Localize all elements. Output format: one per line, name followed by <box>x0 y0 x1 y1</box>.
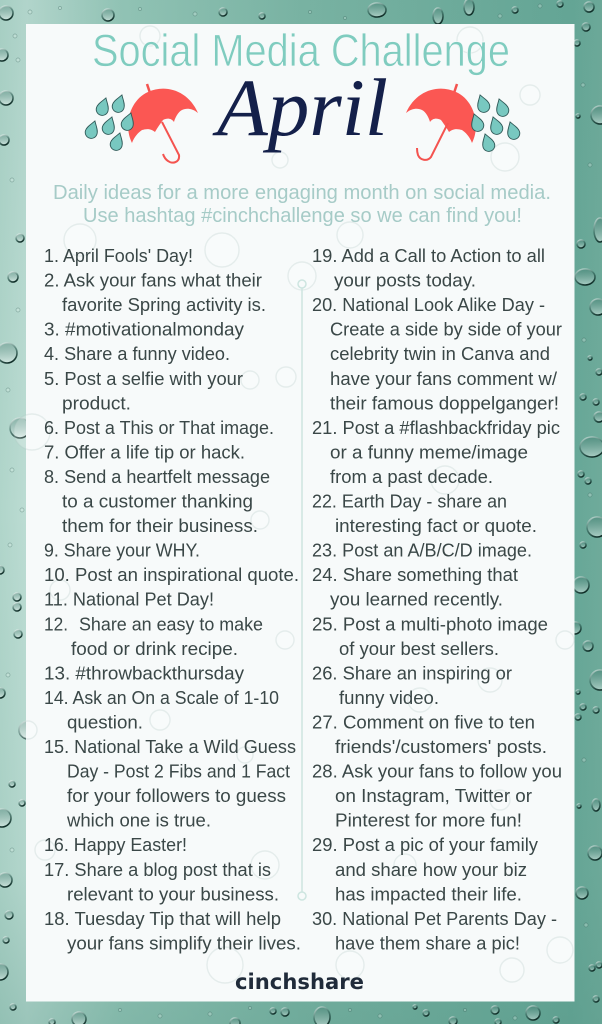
day 19: 19. Add a Call to Action to all <box>312 246 545 266</box>
day 2: favorite Spring activity is. <box>62 295 266 315</box>
day 19 <box>312 246 545 291</box>
day 20: 20. National Look Alike Day - <box>312 295 545 315</box>
day 29: has impacted their life. <box>335 884 522 904</box>
day 12 <box>44 614 263 659</box>
day 18 <box>44 909 301 953</box>
day 29: 29. Post a pic of your family <box>312 835 538 855</box>
day 22: interesting fact or quote. <box>335 516 537 536</box>
title: Social Media Challenge <box>92 25 510 76</box>
day 20: Create a side by side of your <box>330 320 562 340</box>
day 20: have your fans comment w/ <box>330 369 557 389</box>
day 17: relevant to your business. <box>67 884 279 904</box>
day 12: Share an easy to make <box>79 614 263 634</box>
day 26 <box>312 663 512 708</box>
day 22: 22. Earth Day - share an <box>312 492 507 512</box>
day 19: your posts today. <box>334 271 476 291</box>
logo: cinchshare: cinchshare <box>235 970 364 995</box>
day 12: 12. <box>44 614 68 634</box>
day 20 <box>312 295 562 413</box>
day 28 <box>312 762 562 831</box>
day 5 <box>44 369 243 413</box>
day 9: 9. Share your WHY. <box>44 541 200 561</box>
day 18: your fans simplify their lives. <box>67 933 301 953</box>
icon: right umbrella with raindrops <box>406 84 521 160</box>
day 14 <box>44 688 279 732</box>
day 3: 3. #motivationalmonday <box>44 320 244 340</box>
day 14: 14. Ask an On a Scale of 1-10 <box>44 688 279 708</box>
day 25: of your best sellers. <box>339 639 499 659</box>
day 15 <box>44 737 296 831</box>
day 6: 6. Post a This or That image. <box>44 418 274 438</box>
day 2: 2. Ask your fans what their <box>44 271 262 291</box>
day 4: 4. Share a funny video. <box>44 344 230 364</box>
day 24: you learned recently. <box>330 590 503 610</box>
day 21: 21. Post a #flashbackfriday pic <box>312 418 560 438</box>
day 11: 11. National Pet Day! <box>44 590 214 610</box>
day 15: Day - Post 2 Fibs and 1 Fact <box>67 762 290 782</box>
day 13: 13. #throwbackthursday <box>44 663 244 683</box>
heading: April: April <box>212 62 388 153</box>
day 5: product. <box>62 393 131 413</box>
day 21: or a funny meme/image <box>330 442 528 462</box>
day 1: 1. April Fools' Day! <box>44 246 193 266</box>
day 29: and share how your biz <box>335 860 527 880</box>
day 8: to a customer thanking <box>62 492 253 512</box>
day 30 <box>312 909 557 953</box>
day 24 <box>312 565 518 610</box>
right column: days 19-30 <box>312 246 562 953</box>
day 28: on Instagram, Twitter or <box>335 786 532 806</box>
day 17 <box>44 860 279 904</box>
day 12: food or drink recipe. <box>71 639 238 659</box>
day 17: 17. Share a blog post that is <box>44 860 271 880</box>
day 26: funny video. <box>339 688 439 708</box>
day 8: them for their business. <box>62 516 258 536</box>
day 30: have them share a pic! <box>335 933 520 953</box>
day 21: from a past decade. <box>330 467 493 487</box>
day 28: 28. Ask your fans to follow you <box>312 762 562 782</box>
day 26: 26. Share an inspiring or <box>312 663 512 683</box>
day 27: friends'/customers' posts. <box>335 737 547 757</box>
day 7: 7. Offer a life tip or hack. <box>44 442 245 462</box>
center divider line with end circles <box>298 280 306 900</box>
day 20: their famous doppelganger! <box>330 393 559 413</box>
subtitle: Use hashtag #cinchchallenge so we can find you! <box>83 205 522 227</box>
day 30: 30. National Pet Parents Day - <box>312 909 557 929</box>
day 28: Pinterest for more fun! <box>335 811 522 831</box>
icon: left umbrella with raindrops <box>84 84 198 163</box>
subtitle <box>53 182 551 227</box>
day 18: 18. Tuesday Tip that will help <box>44 909 281 929</box>
day 29 <box>312 835 538 904</box>
day 2 <box>44 271 266 315</box>
day 15: for your followers to guess <box>67 786 286 806</box>
left column: days 1-18 <box>44 246 301 953</box>
day 23: 23. Post an A/B/C/D image. <box>312 541 532 561</box>
day 14: question. <box>67 712 143 732</box>
day 20: celebrity twin in Canva and <box>330 344 550 364</box>
day 24: 24. Share something that <box>312 565 518 585</box>
subtitle: Daily ideas for a more engaging month on social media. <box>53 182 551 204</box>
day 27 <box>312 712 547 757</box>
day 8: 8. Send a heartfelt message <box>44 467 270 487</box>
day 16: 16. Happy Easter! <box>44 835 187 855</box>
day 8 <box>44 467 270 536</box>
day 5: 5. Post a selfie with your <box>44 369 243 389</box>
day 21 <box>312 418 560 487</box>
day 25: 25. Post a multi-photo image <box>312 614 548 634</box>
day 15: 15. National Take a Wild Guess <box>44 737 296 757</box>
day 25 <box>312 614 548 659</box>
day 22 <box>312 492 537 536</box>
day 10: 10. Post an inspirational quote. <box>44 565 299 585</box>
day 15: which one is true. <box>66 811 211 831</box>
day 27: 27. Comment on five to ten <box>312 712 535 732</box>
